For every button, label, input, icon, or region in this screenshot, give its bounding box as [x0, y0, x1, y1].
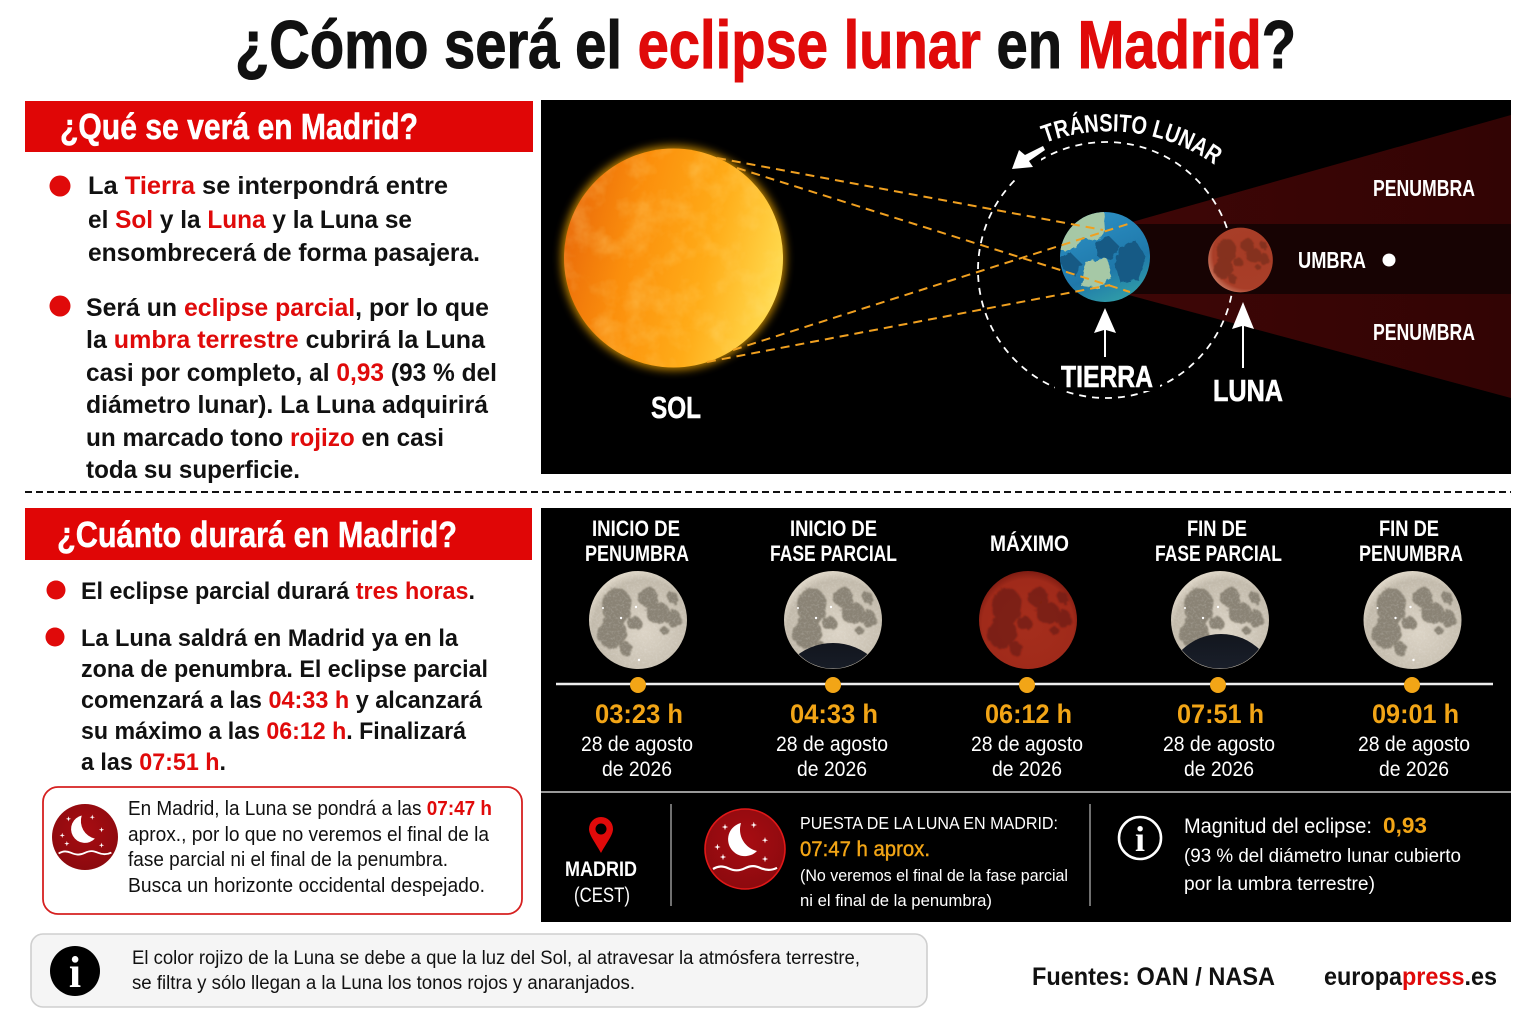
location: Madrid — [565, 817, 637, 907]
phase times: 06:12 h — [985, 699, 1072, 729]
strip divider — [1089, 804, 1091, 906]
label: tierra: TIERRA — [1061, 359, 1153, 394]
phase dates: 28 de agosto — [776, 733, 888, 756]
phase times: 07:51 h — [1177, 699, 1264, 729]
label: tránsito lunar: TRÁNSITO LUNAR — [1040, 112, 1222, 165]
bullet text: horarios: a las 07:51 h. — [81, 749, 226, 776]
icon: earth — [1060, 212, 1150, 302]
phase headings: FASE PARCIAL — [770, 541, 897, 566]
heading: qué se verá: ¿Qué se verá en Madrid? — [60, 106, 418, 147]
phase headings: MÁXIMO — [990, 531, 1069, 556]
phase headings: PENUMBRA — [585, 541, 689, 566]
note text: El color rojizo de la Luna se debe a que la luz del Sol, al atravesar la atmósfera terrestre, — [132, 948, 860, 969]
phase dates: de 2026 — [602, 758, 672, 781]
brand: europapress.es — [1324, 963, 1497, 991]
strip divider — [670, 804, 672, 906]
icon: info solid — [50, 946, 100, 997]
moon: fin de fase parcial — [1171, 571, 1269, 669]
phase dates: de 2026 — [1184, 758, 1254, 781]
phase dates: 28 de agosto — [1163, 733, 1275, 756]
phase headings: FIN DE — [1187, 516, 1247, 541]
moon: inicio de penumbra — [589, 571, 687, 669]
info note — [31, 934, 927, 1007]
moonset text: 07:47 h aprox. — [800, 838, 930, 861]
magnitude text: 0,93 — [1383, 813, 1427, 838]
bullet text: la Tierra se interpondrá — [50, 172, 480, 267]
label: umbra: UMBRA — [1298, 247, 1366, 273]
moonset text: (No veremos el final de la fase parcial — [800, 866, 1068, 885]
phase headings: FASE PARCIAL — [1155, 541, 1282, 566]
shadow cones — [1125, 115, 1511, 398]
heading: qué se verá — [25, 101, 533, 152]
sources: Fuentes: OAN / NASA — [1032, 963, 1275, 991]
magnitude text: por la umbra terrestre) — [1184, 874, 1375, 895]
arrow: transit direction — [1012, 146, 1045, 169]
bullet text: horarios — [46, 625, 488, 776]
icon: moonset — [52, 804, 118, 870]
note text: se filtra y sólo llegan a la Luna los tonos rojos y anaranjados. — [132, 973, 635, 994]
location: Madrid: (CEST) — [574, 884, 630, 907]
arrow: tierra — [1094, 308, 1116, 357]
callout text: En Madrid, la Luna se pondrá a las 07:47 h — [128, 798, 492, 820]
phase dates: de 2026 — [992, 758, 1062, 781]
moonset text — [800, 813, 1068, 910]
icon: info solid: i — [69, 948, 81, 997]
magnitude text: (93 % del diámetro lunar cubierto — [1184, 846, 1461, 867]
icon: eclipsed moon — [1208, 228, 1273, 292]
bullet text: horarios: comenzará a las 04:33 h y alcanzará — [81, 687, 483, 714]
location: Madrid: MADRID — [565, 858, 637, 881]
strip separator — [541, 791, 1511, 793]
icon: moonset large — [705, 809, 785, 889]
icon: map pin — [589, 817, 613, 853]
bullet text: la Tierra se interpondrá: ensombrecerá de forma pasajera. — [88, 239, 480, 267]
timeline axis — [556, 677, 1493, 693]
moon: inicio de fase parcial — [784, 571, 882, 669]
phase dates: 28 de agosto — [581, 733, 693, 756]
moon: máximo — [979, 571, 1077, 669]
phase times: 03:23 h — [595, 699, 683, 729]
label: luna: LUNA — [1213, 373, 1283, 408]
moonset text: PUESTA DE LA LUNA EN MADRID: — [800, 813, 1058, 833]
phase headings: INICIO DE — [790, 516, 877, 541]
phase dates: 28 de agosto — [1358, 733, 1470, 756]
phase headings: PENUMBRA — [1359, 541, 1463, 566]
orbit gap behind transit arrow — [1003, 146, 1041, 180]
phase headings — [585, 516, 1463, 566]
light rays from sun — [707, 158, 1130, 362]
phase times: 09:01 h — [1372, 699, 1459, 729]
bullet text: eclipse parcial — [50, 294, 497, 484]
icon: sun — [562, 146, 786, 370]
bullet text: eclipse parcial: la umbra terrestre cubrirá la Luna — [86, 326, 486, 354]
callout text: aprox., por lo que no veremos el final de la — [128, 824, 490, 846]
bullet text: horarios: zona de penumbra. El eclipse parcial — [81, 656, 488, 683]
magnitude text: Magnitud del eclipse: — [1184, 815, 1372, 838]
bullet text: la Tierra se interpondrá: La Tierra se interpondrá entre — [88, 172, 448, 200]
callout text: fase parcial ni el final de la penumbra. — [128, 849, 448, 871]
phase headings: INICIO DE — [592, 516, 680, 541]
moonset text: ni el final de la penumbra) — [800, 891, 992, 910]
orbit: lunar transit path — [978, 142, 1234, 398]
icon: info outline — [1119, 817, 1161, 859]
heading: cuánto durará: ¿Cuánto durará en Madrid? — [57, 514, 457, 555]
bullet text: la Tierra se interpondrá: el Sol y la Luna y la Luna se — [88, 206, 412, 234]
title: ¿Cómo será el eclipse lunar en Madrid? — [235, 7, 1296, 83]
label mask behind Tierra — [1055, 360, 1160, 391]
panel: eclipse diagram — [541, 100, 1511, 474]
phase dates: de 2026 — [1379, 758, 1449, 781]
icon: info outline: i — [1135, 819, 1145, 859]
arrow: luna — [1232, 302, 1254, 368]
icon: umbra dot — [1382, 254, 1396, 266]
phase dates — [581, 733, 1470, 781]
bullet text: tres horas: El eclipse parcial durará tres horas. — [81, 578, 475, 605]
bullet text: eclipse parcial: un marcado tono rojizo en casi — [86, 424, 444, 452]
callout text: Busca un horizonte occidental despejado. — [128, 875, 485, 897]
label: sol: SOL — [651, 390, 701, 425]
note text — [132, 948, 860, 994]
bullet text: eclipse parcial: diámetro lunar). La Luna adquirirá — [86, 391, 488, 419]
callout text — [128, 798, 492, 897]
bullet text: horarios: La Luna saldrá en Madrid ya en la — [81, 625, 459, 652]
callout: puesta de la luna — [43, 787, 522, 914]
bullet text: horarios: su máximo a las 06:12 h. Finalizará — [81, 718, 467, 745]
phase times — [595, 699, 1459, 729]
bullet text: eclipse parcial: casi por completo, al 0,93 (93 % del — [86, 359, 497, 387]
phase dates: 28 de agosto — [971, 733, 1083, 756]
label: penumbra bottom: PENUMBRA — [1373, 319, 1475, 345]
phase times: 04:33 h — [790, 699, 878, 729]
moon: fin de penumbra — [1364, 571, 1462, 669]
magnitude text — [1184, 813, 1461, 895]
divider — [25, 491, 1511, 493]
panel: cuánto durará en Madrid — [25, 508, 532, 914]
bullet text: eclipse parcial: Será un eclipse parcial, por lo que — [86, 294, 489, 322]
phase dates: de 2026 — [797, 758, 867, 781]
panel: timeline — [541, 508, 1511, 922]
bullet text: eclipse parcial: toda su superficie. — [86, 456, 300, 484]
panel: qué se verá en Madrid — [25, 101, 533, 484]
phase headings: FIN DE — [1379, 516, 1439, 541]
label: penumbra top: PENUMBRA — [1373, 175, 1475, 201]
